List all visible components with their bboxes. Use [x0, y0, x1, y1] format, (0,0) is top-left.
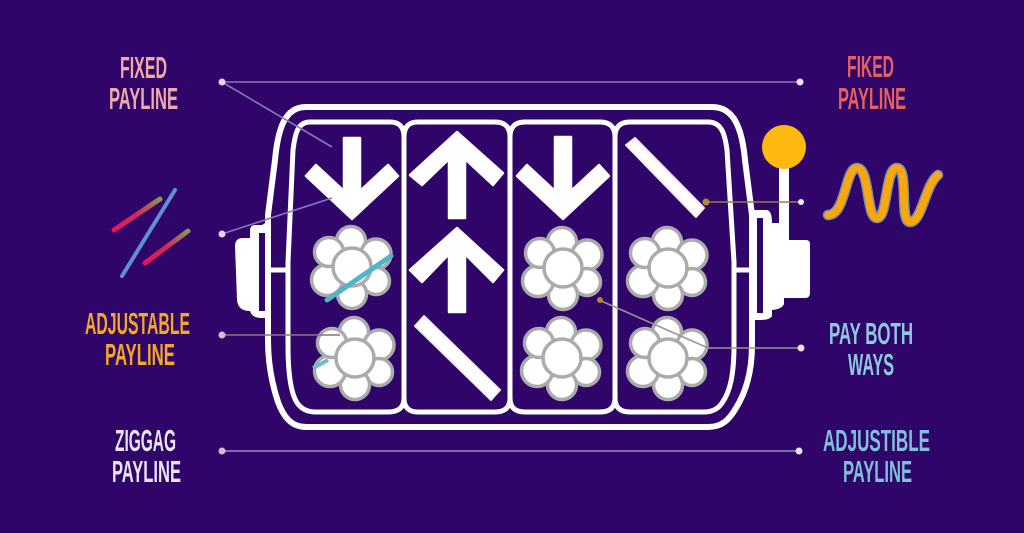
connector: left upper — [218, 198, 332, 238]
lever ball — [762, 125, 806, 169]
hub cross bars — [268, 268, 752, 272]
label: fixed payline, top left: FIXED — [120, 50, 167, 85]
label: pay both ways, right: WAYS — [848, 347, 894, 382]
diagonal bar, reel 4 — [626, 138, 704, 217]
flower symbol, reel 4 top — [628, 228, 707, 310]
outer frame — [268, 107, 752, 427]
panel 1 outline — [288, 122, 404, 412]
panel 3 outline — [510, 122, 615, 412]
connector: left lower — [218, 332, 340, 338]
label: adjustable payline, right: PAYLINE — [843, 454, 912, 489]
up arrow, reel 2 middle — [410, 228, 503, 312]
flower symbol, reel 3 top — [522, 228, 602, 310]
icon: crossing payline strokes — [114, 190, 188, 276]
left side hub — [235, 220, 270, 318]
label: fixed payline, top left: PAYLINE — [109, 81, 178, 116]
label: pay both ways, right: PAY BOTH — [829, 316, 913, 351]
connector: right upper — [702, 198, 804, 206]
down arrow, reel 3 — [517, 137, 609, 219]
label: zigzag payline, left — [112, 423, 181, 489]
connector: bottom line — [218, 448, 802, 454]
icon: zigzag wave — [828, 168, 938, 222]
label: pay both ways, right — [829, 316, 913, 382]
connector: top line — [218, 78, 804, 147]
label: fixed payline, top right: FIKED — [847, 49, 894, 84]
label: fixed payline, top left — [109, 50, 178, 116]
label: adjustable payline, right — [823, 423, 930, 489]
hub slots — [259, 218, 763, 313]
label: adjustable payline, left — [85, 306, 190, 372]
label: adjustable payline, left: ADJUSTABLE — [85, 306, 190, 341]
slot machine body — [235, 107, 810, 427]
flower symbol, reel 1 top — [312, 226, 391, 308]
label: zigzag payline, left: PAYLINE — [112, 454, 181, 489]
panel 4 outline — [615, 122, 734, 412]
label: fixed payline, top right — [838, 49, 906, 116]
label: adjustable payline, right: ADJUSTIBLE — [823, 423, 930, 458]
connector: right lower — [597, 297, 804, 352]
lever stick — [779, 165, 789, 243]
up arrow, reel 2 top — [410, 132, 503, 218]
teal slash, reel 1 top — [327, 256, 391, 300]
label: adjustable payline, left: PAYLINE — [105, 337, 175, 372]
diagonal bar, reel 2 bottom — [415, 316, 500, 400]
flower symbol, reel 4 bottom — [628, 318, 707, 400]
label: fixed payline, top right: PAYLINE — [838, 81, 906, 116]
right side hub and lever base — [750, 210, 810, 320]
flower symbol, reel 1 bottom — [314, 318, 394, 400]
down arrow, reel 1 — [306, 138, 398, 219]
label: zigzag payline, left: ZIGGAG — [115, 423, 176, 458]
teal slash, reel 1 bottom — [313, 360, 328, 368]
flower symbol, reel 3 bottom — [522, 318, 601, 400]
panel 2 outline — [404, 122, 510, 412]
